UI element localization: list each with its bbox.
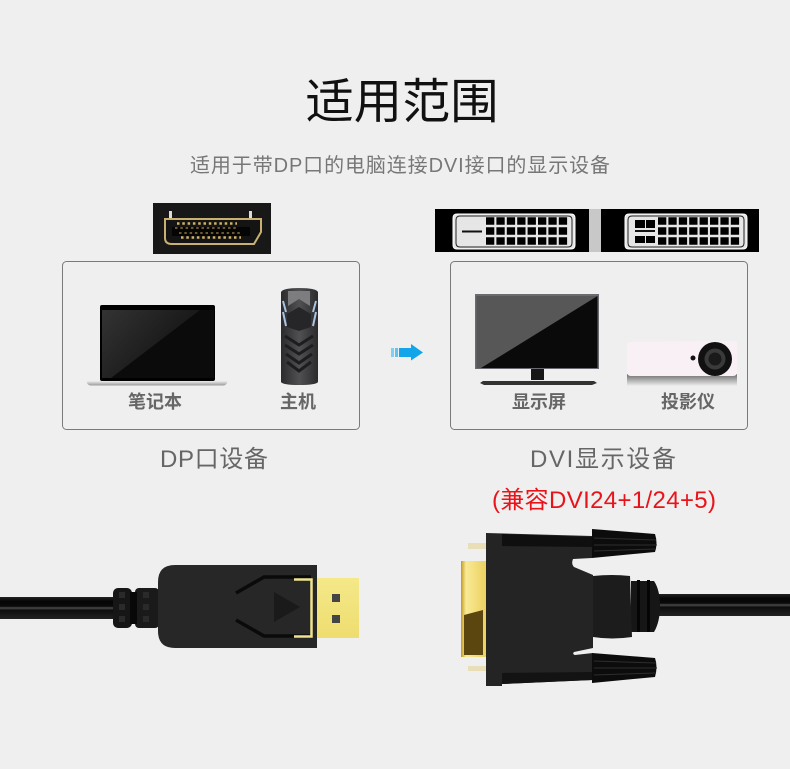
icon: projector [627, 341, 737, 386]
panel: DVI devices [450, 262, 748, 430]
subtitle: 适用于带DP口的电脑连接DVI接口的显示设备 [190, 154, 610, 177]
icon: desktop tower [281, 288, 318, 385]
projector label: 投影仪 [661, 392, 715, 412]
icon: laptop [87, 305, 227, 386]
DP cable [0, 597, 115, 619]
DP body [158, 565, 317, 648]
hood top band [502, 534, 592, 547]
DVI pins [468, 543, 486, 671]
DVI neck [593, 575, 632, 638]
arrow [391, 344, 423, 360]
DP latch [236, 577, 312, 636]
DVI device caption: DVI显示设备 [530, 446, 676, 473]
DVI hood [486, 533, 593, 686]
hood bottom band [502, 672, 592, 684]
icon: DVI 24+1 port thumbnail [435, 209, 589, 252]
monitor label: 显示屏 [512, 392, 566, 412]
panel: DP devices [62, 262, 360, 430]
laptop label: 笔记本 [128, 392, 182, 412]
DP plug and cable [0, 565, 359, 648]
DVI strain relief [631, 580, 660, 632]
bottom thumb screw [592, 653, 657, 683]
icon: DVI 24+5 port thumbnail [601, 209, 759, 252]
DP strain relief [113, 588, 159, 628]
top thumb screw [592, 529, 657, 558]
DVI gold shell [461, 561, 486, 657]
texture strip between ports [589, 209, 601, 252]
icon: DP port thumbnail [153, 203, 271, 254]
icon: monitor [475, 294, 599, 385]
title: 适用范围 [306, 76, 498, 129]
DVI plug and cable [461, 529, 790, 686]
red compatibility note: (兼容DVI24+1/24+5) [492, 487, 716, 514]
DP gold connector [316, 578, 359, 638]
DP device caption: DP口设备 [160, 446, 268, 473]
DVI cable [655, 594, 790, 616]
tower label: 主机 [280, 392, 316, 412]
